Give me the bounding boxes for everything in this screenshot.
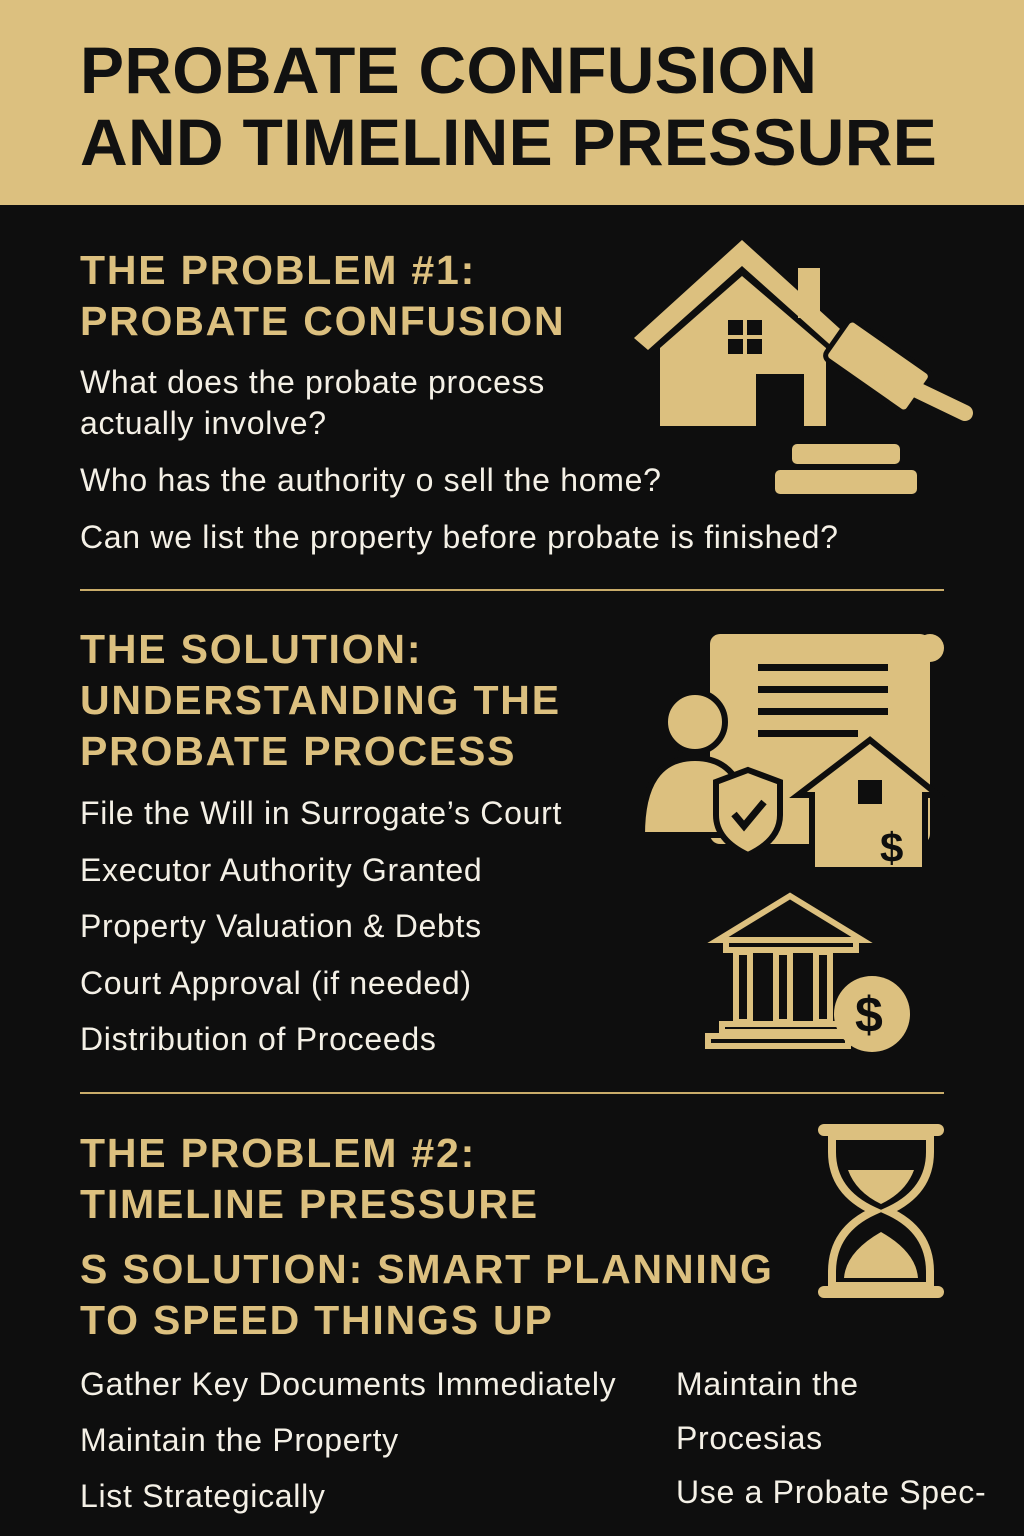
heading: solution 2: TO SPEED THINGS UP — [80, 1297, 554, 1343]
header band — [0, 0, 1024, 205]
text block: planning steps left — [80, 1366, 616, 1514]
heading: problem 1 — [80, 247, 565, 344]
text block: planning steps left: Maintain the Property — [80, 1422, 399, 1458]
text block: problem 1 questions: actually involve? — [80, 405, 327, 441]
heading: problem 2: THE PROBLEM #2: — [80, 1130, 476, 1176]
heading: solution 1: THE SOLUTION: — [80, 626, 422, 672]
icon: bank with coin — [705, 892, 910, 1052]
text block: planning steps right: Procesias — [676, 1420, 823, 1456]
text block: problem 1 questions: What does the probate process — [80, 364, 545, 400]
title — [80, 33, 937, 179]
text block: planning steps right: Maintain the — [676, 1366, 859, 1402]
text block: problem 1 questions: Who has the authority o sell the home? — [80, 462, 662, 498]
text block: planning steps left: Gather Key Documents Immediately — [80, 1366, 616, 1402]
text block: probate steps: Distribution of Proceeds — [80, 1021, 437, 1057]
title: AND TIMELINE PRESSURE — [80, 105, 937, 179]
heading: problem 1: PROBATE CONFUSION — [80, 298, 565, 344]
text block: problem 1 questions: Can we list the property before probate is finished? — [80, 519, 839, 555]
heading: solution 2: S SOLUTION: SMART PLANNING — [80, 1246, 774, 1292]
text block: probate steps: Court Approval (if needed) — [80, 965, 472, 1001]
text block: planning steps right — [676, 1366, 986, 1510]
heading: solution 1: UNDERSTANDING THE — [80, 677, 561, 723]
heading: problem 1: THE PROBLEM #1: — [80, 247, 476, 293]
heading: solution 2 — [80, 1246, 774, 1343]
text block: probate steps: Property Valuation & Debts — [80, 908, 482, 944]
icon: hourglass — [818, 1124, 944, 1298]
heading: solution 1 — [80, 626, 561, 774]
icon: person, document, house: $ — [880, 824, 903, 871]
heading: problem 2: TIMELINE PRESSURE — [80, 1181, 539, 1227]
heading: problem 2 — [80, 1130, 539, 1227]
icon: house and gavel — [634, 240, 973, 494]
title: PROBATE CONFUSION — [80, 33, 817, 107]
heading: solution 1: PROBATE PROCESS — [80, 728, 516, 774]
text block: probate steps: Executor Authority Granted — [80, 852, 482, 888]
text block: problem 1 questions — [80, 364, 839, 555]
icon: person, document, house — [645, 634, 944, 871]
text block: probate steps: File the Will in Surrogate’s Court — [80, 795, 562, 831]
text block: planning steps right: Use a Probate Spec- — [676, 1474, 986, 1510]
icon: bank with coin: $ — [855, 987, 883, 1043]
text block: planning steps left: List Strategically — [80, 1478, 326, 1514]
text block: probate steps — [80, 795, 562, 1057]
